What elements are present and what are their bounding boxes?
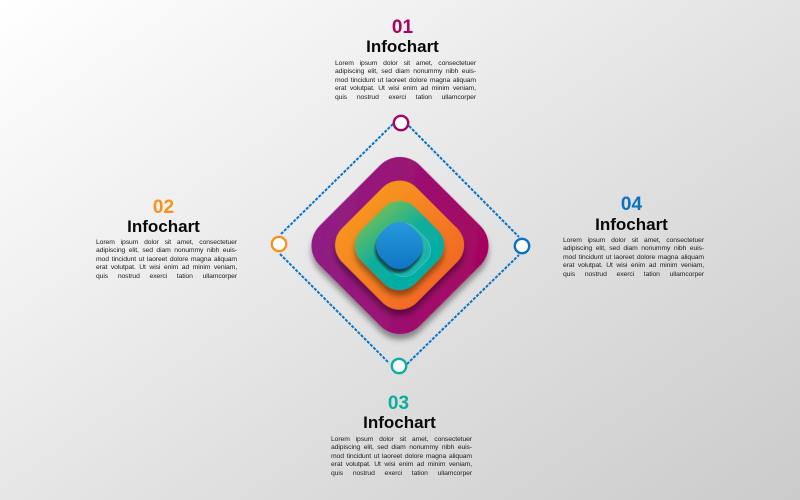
dashed connector diamond — [280, 124, 519, 364]
shadow under blue core — [368, 219, 429, 280]
diamond: blue core — [369, 215, 430, 276]
text block 01: Lorem ipsum dolor sit amet, consectetuer — [335, 60, 476, 67]
text block 02: quis nostrud exerci tation ullamcorper — [96, 273, 237, 280]
text block 02: mod tincidunt ut laoreet dolore magna aliquam — [96, 256, 237, 263]
text block 03: Infochart — [363, 413, 436, 432]
text block 04: Lorem ipsum dolor sit amet, consectetuer — [563, 237, 704, 244]
text block 03: 03 — [388, 393, 409, 414]
text block 04: erat volutpat. Ut wisi enim ad minim veniam, — [563, 262, 704, 269]
text block 03: Lorem ipsum dolor sit amet, consectetuer — [331, 436, 472, 443]
text block 02: erat volutpat. Ut wisi enim ad minim veniam, — [96, 264, 237, 271]
text block 01: erat volutpat. Ut wisi enim ad minim veniam, — [335, 85, 476, 92]
text block 03: erat volutpat. Ut wisi enim ad minim veniam, — [331, 461, 472, 468]
node: 03 — [392, 359, 406, 373]
text block 04 — [563, 194, 704, 278]
node: 02 — [272, 237, 286, 251]
text block 02: adipiscing elit, sed diam nonummy nibh euis- — [96, 247, 237, 254]
text block 03: mod tincidunt ut laoreet dolore magna aliquam — [331, 453, 472, 460]
soft highlight on green layer — [371, 217, 437, 283]
node: 01 — [394, 116, 408, 130]
text block 02: Infochart — [127, 217, 200, 236]
text block 03: adipiscing elit, sed diam nonummy nibh euis- — [331, 444, 472, 451]
text block 01: 01 — [392, 17, 413, 38]
text block 04: Infochart — [595, 215, 668, 234]
diamond: magenta layer — [300, 145, 500, 346]
text block 04: mod tincidunt ut laoreet dolore magna aliquam — [563, 254, 704, 261]
text block 02: 02 — [153, 197, 174, 218]
text block 02 — [96, 197, 238, 280]
text block 01: mod tincidunt ut laoreet dolore magna aliquam — [335, 77, 476, 84]
node: 04 — [515, 239, 529, 253]
text block 01: quis nostrud exerci tation ullamcorper — [335, 94, 476, 101]
text block 01: adipiscing elit, sed diam nonummy nibh euis- — [335, 68, 476, 75]
text block 04: 04 — [621, 194, 642, 215]
text block 04: quis nostrud exerci tation ullamcorper — [563, 271, 704, 278]
text block 03: quis nostrud exerci tation ullamcorper — [331, 470, 472, 477]
text block 01 — [335, 17, 476, 101]
text block 04: adipiscing elit, sed diam nonummy nibh euis- — [563, 245, 704, 252]
text block 03 — [331, 393, 472, 477]
diamond: orange layer — [325, 171, 474, 320]
text block 01: Infochart — [366, 37, 439, 56]
diamond: green layer — [346, 192, 453, 299]
text block 02: Lorem ipsum dolor sit amet, consectetuer — [96, 239, 237, 246]
